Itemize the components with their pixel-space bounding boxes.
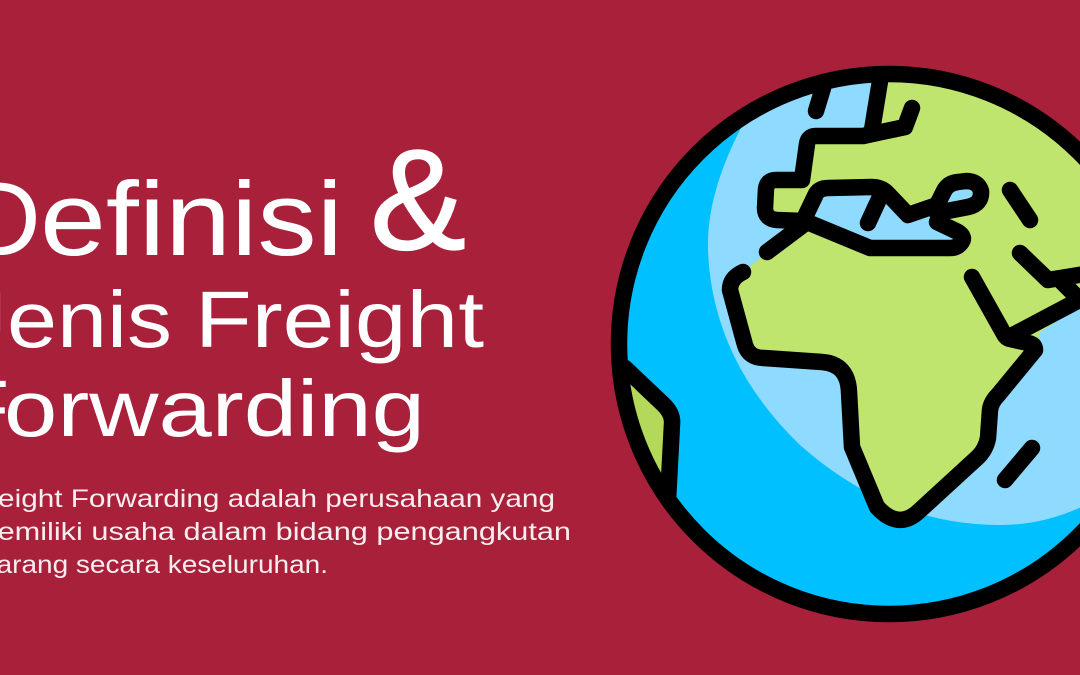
globe outline <box>619 74 1080 614</box>
landmass: Europe, Africa, Asia <box>730 60 1080 518</box>
ocean <box>619 74 1080 614</box>
title: efinisi <box>40 161 343 278</box>
title: & <box>370 121 466 280</box>
title <box>0 121 484 453</box>
description text <box>0 485 571 579</box>
coastlines <box>625 75 1080 520</box>
ocean highlight <box>708 50 1080 525</box>
title: Freight <box>195 275 484 364</box>
title: enis <box>7 275 172 364</box>
title: orwarding <box>4 364 425 453</box>
icon: globe <box>600 50 1080 614</box>
landmass: South America <box>630 384 664 474</box>
